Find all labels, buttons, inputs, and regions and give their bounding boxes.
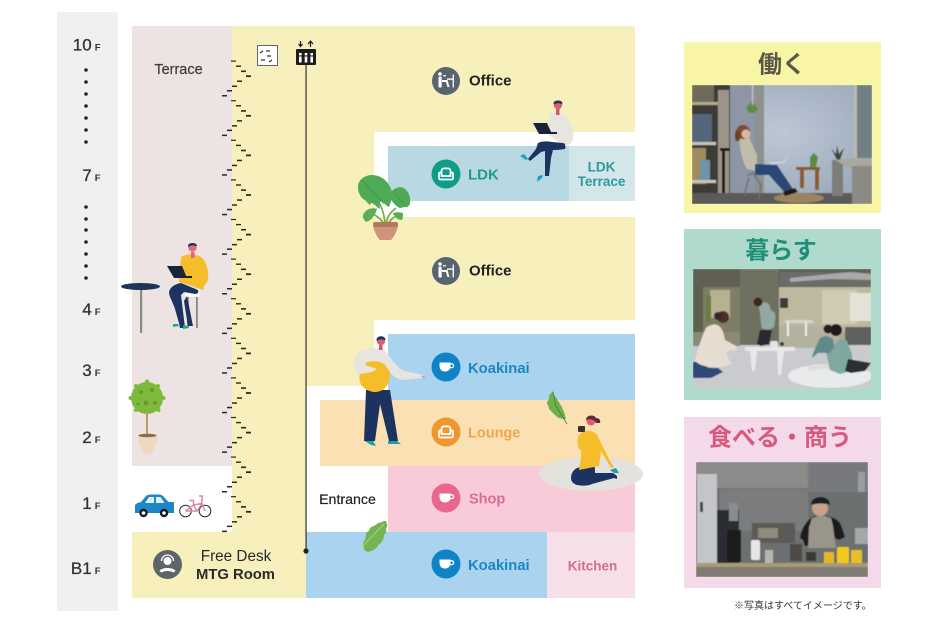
icon: Lounge bbox=[432, 418, 460, 446]
label: LDK: LDK bbox=[468, 166, 499, 184]
room: Koakinai 3F bbox=[388, 334, 635, 400]
icon: Free Desk bbox=[153, 550, 182, 579]
icon: Shop bbox=[432, 484, 460, 512]
room: LDK bbox=[388, 146, 569, 201]
heading: 働く: 働く bbox=[758, 52, 806, 78]
label: Entrance: Entrance bbox=[319, 492, 376, 508]
floor label 4F: 4 F bbox=[82, 300, 101, 319]
panel: floor number strip bbox=[57, 12, 118, 611]
icon: elevator bbox=[296, 41, 316, 65]
photo: living bbox=[693, 269, 872, 388]
icon: Koakinai 3F bbox=[432, 352, 460, 382]
panel: building section bbox=[132, 26, 635, 598]
dots between 7F and 4F bbox=[84, 205, 88, 280]
icon: Office 10F bbox=[432, 67, 460, 95]
panel: 食べる・商う bbox=[684, 417, 881, 588]
label: Shop: Shop bbox=[469, 492, 505, 508]
illustration: table bbox=[121, 283, 160, 333]
illustration: fern leaf bbox=[547, 390, 567, 424]
label: Free Desk MTG Room: MTG Room bbox=[196, 567, 275, 583]
room: Kitchen bbox=[547, 532, 635, 598]
label: Free Desk MTG Room: Free Desk bbox=[201, 548, 272, 565]
floor label 3F: 3 F bbox=[82, 361, 101, 380]
floor label 1F: 1 F bbox=[82, 494, 101, 513]
icon: Koakinai B1 bbox=[432, 550, 460, 578]
icon: car bbox=[135, 494, 174, 517]
icon: stairs bbox=[258, 46, 278, 66]
label: Office 10F: Office bbox=[469, 72, 512, 90]
illustration: person sitting on LDK wall bbox=[520, 100, 573, 182]
label: Kitchen: Kitchen bbox=[568, 558, 617, 574]
floor label 2F: 2 F bbox=[82, 428, 101, 447]
photo: kitchen bbox=[696, 462, 868, 577]
label: Office 5F: Office bbox=[469, 262, 512, 280]
room: Shop bbox=[388, 466, 635, 532]
illustration: tree in pot bbox=[128, 380, 166, 454]
floor label B1F: B1 F bbox=[71, 559, 101, 578]
heading: 暮らす: 暮らす bbox=[745, 238, 817, 264]
icon: Office 5F bbox=[432, 257, 460, 285]
room: LDK Terrace bbox=[569, 146, 635, 201]
label: Terrace: Terrace bbox=[154, 62, 203, 78]
label: Koakinai 3F: Koakinai bbox=[468, 361, 530, 377]
icon: LDK bbox=[432, 160, 460, 188]
room: Lounge bbox=[320, 400, 635, 466]
icon: bicycle bbox=[180, 496, 211, 517]
floor label 10F: 10 F bbox=[73, 36, 101, 54]
room: Koakinai B1 bbox=[306, 532, 547, 598]
panel: 暮らす bbox=[684, 229, 881, 400]
illustration: monstera plant bbox=[358, 175, 410, 240]
heading: 食べる・商う: 食べる・商う bbox=[708, 424, 852, 452]
illustration: woman on rug bbox=[539, 416, 643, 491]
label: Lounge: Lounge bbox=[468, 426, 520, 442]
panel: 働く bbox=[684, 42, 881, 213]
caption: photo note: ※写真はすべてイメージです。 bbox=[734, 599, 872, 612]
floor label 7F: 7 F bbox=[82, 166, 101, 185]
illustration: oak leaf bbox=[359, 521, 387, 552]
illustration: standing man with yellow ball bbox=[354, 336, 425, 446]
elevator shaft line bbox=[303, 65, 309, 554]
illustration: person with laptop and yellow sweater bbox=[167, 243, 208, 329]
stair zigzag bbox=[222, 60, 251, 532]
label: LDK Terrace: Terrace bbox=[578, 174, 626, 189]
photo: working bbox=[692, 85, 872, 204]
dots between 10F and 7F bbox=[84, 68, 88, 144]
label: Koakinai B1: Koakinai bbox=[468, 558, 530, 574]
label: LDK Terrace: LDK bbox=[588, 160, 616, 174]
